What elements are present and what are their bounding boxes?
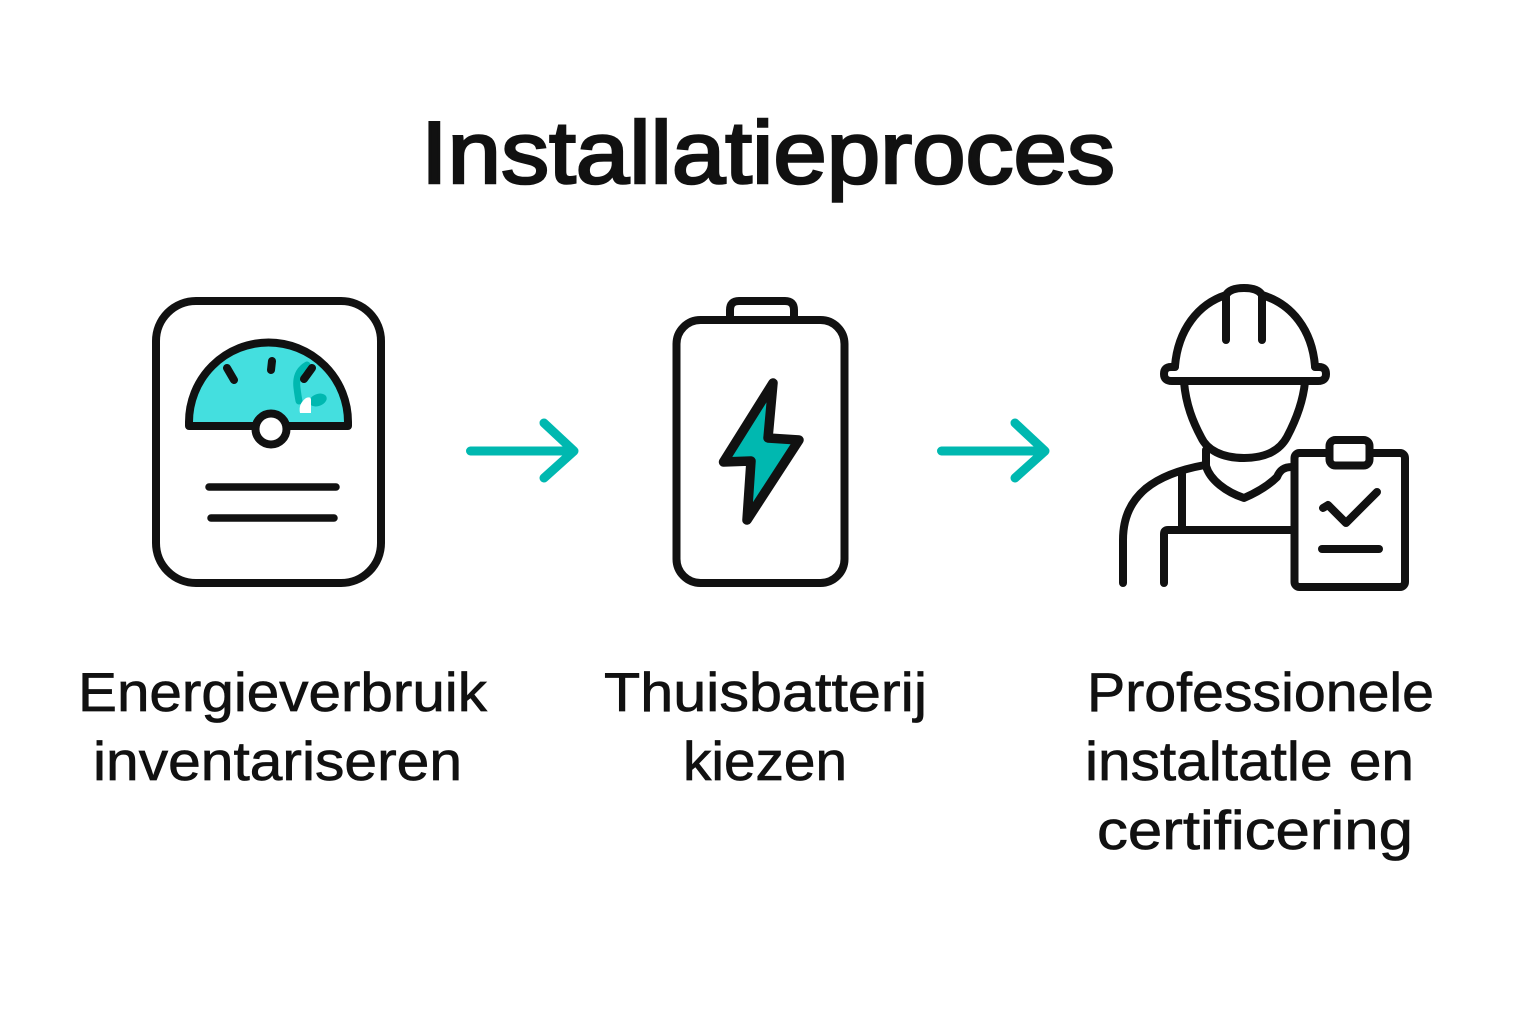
face xyxy=(1184,382,1305,458)
clipboard xyxy=(1294,440,1405,587)
label: step 2: Thuisbatterij xyxy=(604,661,927,723)
label: step 3 xyxy=(1085,661,1434,861)
hard hat xyxy=(1164,288,1326,381)
step 3 icon: installer with clipboard xyxy=(1123,288,1405,587)
title: Installatieproces xyxy=(421,103,1115,202)
arrow 1 xyxy=(470,423,574,478)
label: step 1: Energieverbruik xyxy=(78,661,488,723)
gauge dial xyxy=(189,342,348,444)
arrow 2 xyxy=(942,423,1045,478)
label: step 3: instaltatle en xyxy=(1085,730,1414,792)
label: step 1: inventariseren xyxy=(93,730,462,792)
label: step 1 xyxy=(78,661,488,792)
collar xyxy=(1206,450,1292,498)
label: step 2: kiezen xyxy=(683,730,847,792)
label: step 3: certificering xyxy=(1097,799,1413,861)
label: step 2 xyxy=(604,661,927,792)
shoulder xyxy=(1123,465,1205,583)
lightning bolt xyxy=(724,383,799,520)
step 1 icon: energy meter document xyxy=(156,301,381,583)
text lines xyxy=(209,487,336,518)
overalls xyxy=(1164,474,1292,583)
label: step 3: Professionele xyxy=(1087,661,1434,723)
step 2 icon: battery with lightning bolt xyxy=(676,301,844,583)
